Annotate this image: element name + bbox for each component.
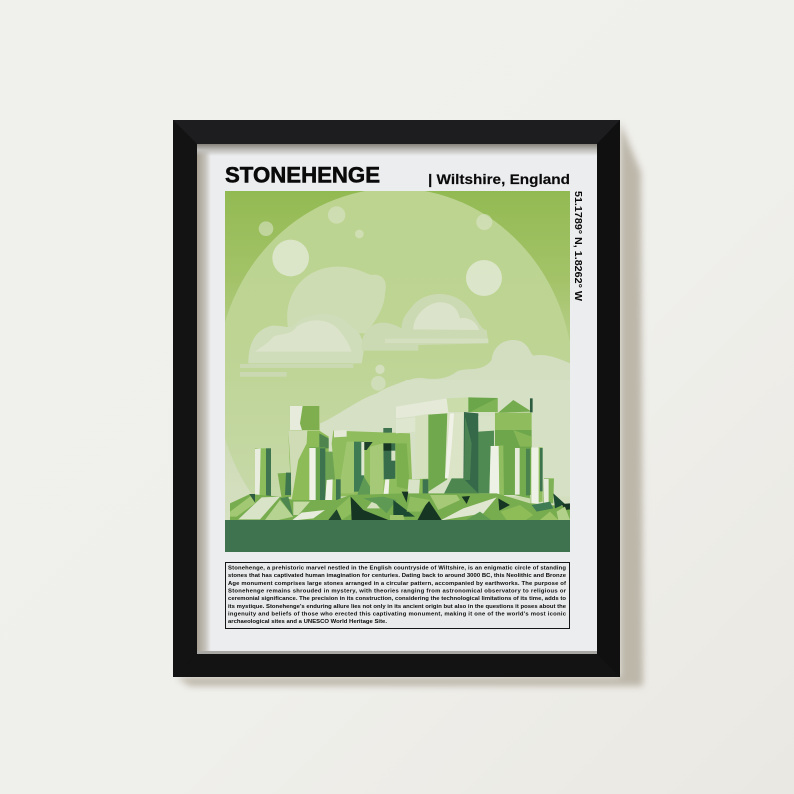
right bbox=[489, 445, 504, 497]
left tall trilithon bbox=[288, 406, 336, 500]
sky elements: dome, moons, clouds bbox=[225, 191, 570, 504]
far left bbox=[255, 448, 271, 496]
illustration bbox=[217, 188, 573, 572]
front cloud bbox=[410, 340, 570, 380]
description box: ingenuity and beliefs of those who erected this captivating monument, making it one of the world's most iconic bbox=[228, 612, 567, 618]
description box: Stonehenge, a prehistoric marvel nestled in the English countryside of Wiltshire, is an enigmatic circle of standing bbox=[228, 566, 566, 572]
poster paper bbox=[197, 144, 597, 654]
black picture frame bbox=[173, 120, 620, 677]
description box: Age monument comprises large stones arranged in a circular pattern, accompanied by earthworks. The purpose of bbox=[228, 581, 566, 587]
small bubbles bbox=[375, 365, 385, 374]
moons bbox=[272, 240, 502, 296]
coordinates: 51.1789° N, 1.8262° W bbox=[572, 191, 584, 301]
ground band bbox=[225, 520, 570, 552]
back disc bbox=[287, 267, 386, 333]
stones bbox=[230, 380, 570, 523]
right cloud bbox=[361, 294, 488, 351]
short left bbox=[278, 473, 291, 498]
short bbox=[325, 480, 336, 500]
rubble foreground bbox=[230, 492, 570, 523]
title: STONEHENGE bbox=[225, 162, 380, 188]
frame shadow bbox=[176, 122, 643, 686]
sky bbox=[225, 191, 570, 552]
description box: archaeological sites and a UNESCO World Heritage Site. bbox=[228, 619, 387, 625]
central doorway bbox=[332, 428, 413, 497]
description box: Stonehenge remains shrouded in mystery, with theories ranging from astronomical observatory to religious or bbox=[228, 588, 567, 594]
left cloud bbox=[248, 326, 364, 364]
description box bbox=[226, 562, 570, 628]
description box: ceremonial significance. The precision in its construction, considering the technological limitations of its time, adds to bbox=[228, 596, 566, 602]
right great trilithon bbox=[396, 397, 533, 495]
back haze cloud bbox=[320, 380, 570, 497]
tall middle left bbox=[309, 447, 325, 503]
description box: stones that has captivated human imagination for centuries. Dating back to around 3000 BC, this Neolithic and Bronze bbox=[228, 573, 567, 579]
location subtitle: | Wiltshire, England bbox=[428, 171, 570, 187]
standing stones bbox=[255, 445, 554, 507]
description box: its mystique. Stonehenge's enduring allure lies not only in its ancient origin but also in the questions it poses about the bbox=[228, 604, 567, 610]
